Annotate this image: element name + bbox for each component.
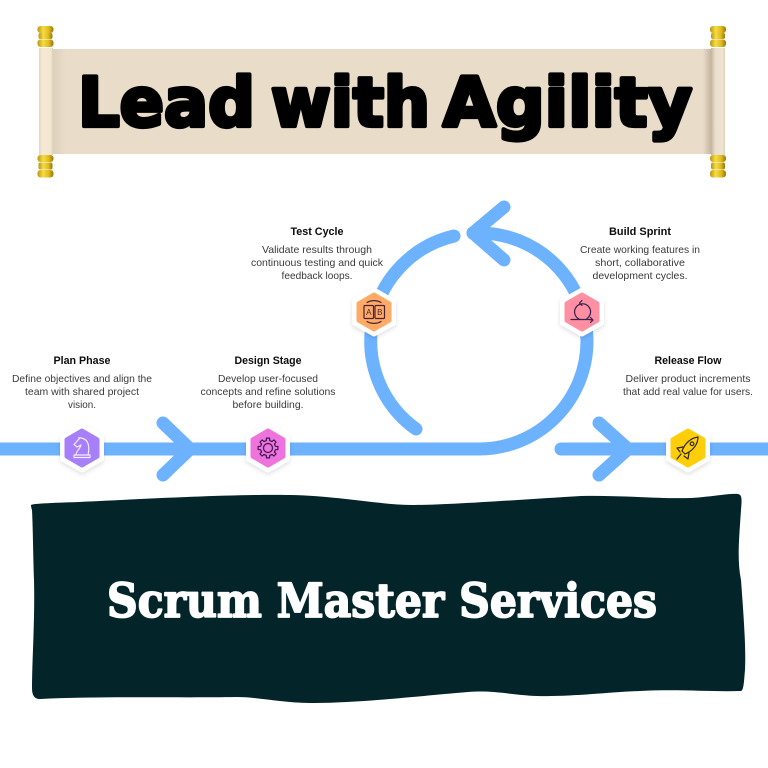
title — [78, 64, 692, 143]
step: design stage — [200, 355, 336, 470]
arrow: loop head — [473, 207, 504, 260]
banner title: Scrum Master Services — [107, 574, 657, 629]
heading: Build Sprint — [609, 226, 671, 238]
left scroll rod — [38, 26, 54, 178]
arc: left of loop — [371, 236, 454, 429]
icon: A/B on orange hexagon — [354, 290, 394, 334]
icon: sprint loop on rose hexagon — [562, 290, 602, 334]
icon: rocket on yellow hexagon — [668, 426, 708, 470]
line: end — [628, 442, 768, 456]
scroll parchment — [53, 49, 711, 154]
step: release flow — [623, 355, 753, 470]
description — [623, 374, 753, 398]
description: team with shared project — [25, 387, 139, 398]
description: Validate results through — [262, 245, 372, 256]
description: development cycles. — [592, 271, 688, 282]
description: Create working features in — [580, 245, 700, 256]
description — [251, 245, 384, 282]
description: continuous testing and quick — [251, 258, 384, 269]
line: start — [0, 442, 190, 456]
icon: A/B on orange hexagon: A — [366, 308, 372, 317]
description: feedback loops. — [282, 271, 352, 282]
arrow: first — [163, 423, 190, 475]
description — [580, 245, 700, 282]
heading: Design Stage — [234, 355, 302, 367]
description: concepts and refine solutions — [200, 387, 336, 398]
heading: Release Flow — [654, 355, 722, 367]
description: short, collaborative — [595, 258, 685, 269]
description: vision. — [68, 400, 96, 411]
arrow: final — [561, 423, 628, 475]
flow line with loop — [0, 207, 768, 475]
line: through loop — [190, 233, 587, 449]
description: Define objectives and align the — [12, 374, 152, 385]
title: with — [271, 64, 430, 143]
description — [200, 374, 336, 411]
step: test cycle — [251, 226, 394, 334]
right scroll rod — [710, 26, 726, 178]
step: build sprint — [562, 226, 700, 334]
right parchment shading — [703, 49, 711, 154]
description: that add real value for users. — [623, 387, 753, 398]
icon: gear on pink hexagon — [248, 426, 288, 470]
title: Lead — [78, 64, 255, 143]
step: plan phase — [12, 355, 152, 470]
description: Develop user-focused — [218, 374, 318, 385]
description: Deliver product increments — [626, 374, 750, 385]
heading: Test Cycle — [290, 226, 344, 238]
title: Agility — [443, 64, 692, 143]
heading: Plan Phase — [54, 355, 110, 367]
left parchment shading — [53, 49, 65, 154]
icon: knight on purple hexagon — [62, 426, 102, 470]
description — [12, 374, 152, 411]
title scroll banner — [38, 26, 726, 178]
description: before building. — [232, 400, 304, 411]
panel: services banner — [31, 494, 745, 703]
icon: A/B on orange hexagon: B — [377, 308, 382, 317]
